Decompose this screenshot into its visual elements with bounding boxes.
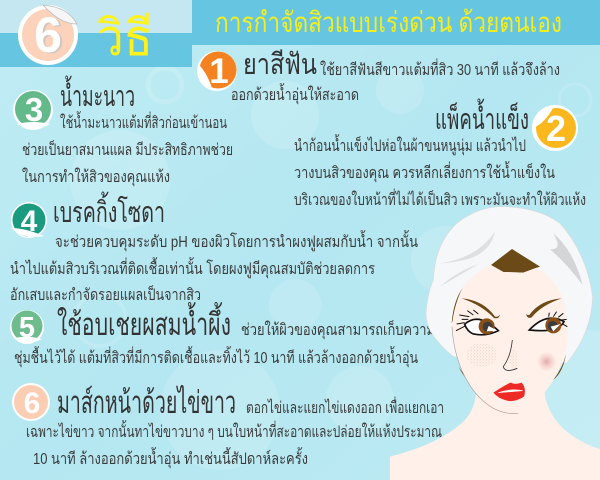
section 2: ice pack (294, 98, 586, 209)
eyebrows (462, 298, 562, 318)
heading 3: น้ำมะนาว (60, 75, 135, 113)
badge 3 (13, 90, 53, 130)
heading 2: แพ็คน้ำแข็ง (435, 98, 529, 136)
badge 1 (197, 51, 237, 91)
body 1 (231, 58, 560, 105)
header band: left (0, 0, 192, 67)
section 1: toothpaste (197, 49, 560, 105)
badge 4: 4 (21, 205, 38, 238)
heading 1: ยาสีฟัน (243, 49, 317, 81)
face (452, 265, 568, 414)
body 2 (294, 134, 586, 209)
nose (503, 340, 517, 370)
shoulders and neck (390, 387, 600, 480)
body 3: ช่วยเป็นยาสมานแผล มีประสิทธิภาพช่วย (22, 139, 233, 159)
body 1: ออกด้วยน้ำอุ่นให้สะอาด (231, 83, 359, 105)
body 3: ใช้น้ำมะนาวแต้มที่สิวก่อนเข้านอน (60, 111, 227, 132)
section 3: lemon (13, 75, 233, 187)
heading 4: เบรคกิ้งโซดา (53, 191, 165, 229)
badge 5 (10, 310, 44, 344)
towel (426, 207, 593, 363)
body 2: นำก้อนน้ำแข็งไปห่อในผ้าขนหนูนุ่ม แล้วนำไป (294, 134, 526, 156)
badge: large 6: 6 (36, 8, 64, 64)
body 6 (26, 396, 444, 469)
illustration: woman with towel (390, 207, 600, 480)
badge 6 (12, 383, 50, 421)
right eye (529, 312, 567, 333)
acne spots (466, 343, 518, 369)
body 6: ตอกไข่และแยกไข่แดงออก เพื่อแยกเอา (246, 396, 444, 417)
header band: right (192, 0, 600, 45)
pimple (537, 352, 557, 372)
badge 2 (532, 105, 578, 151)
body 5 (14, 319, 435, 368)
body 3 (22, 111, 233, 187)
badge: large 6: 6 (34, 7, 62, 63)
body 6: เฉพาะไข่ขาว จากนั้นทาไข่ขาวบาง ๆ บนใบหน้าที่สะอาดและปล่อยให้แห้งประมาณ (26, 420, 442, 441)
towel folds (440, 232, 583, 287)
badge: large 6 (18, 5, 78, 65)
left eye (456, 310, 498, 335)
body 3: ในการทำให้สิวของคุณแห้ง (22, 167, 170, 187)
body 4: อักเสบและกำจัดรอยแผลเป็นจากสิว (10, 284, 201, 304)
body 4: จะช่วยควบคุมระดับ pH ของผิวโดยการนำผงฟูผสมกับน้ำ จากนั้น (55, 230, 418, 252)
badge 6: 6 (24, 387, 40, 420)
lips (493, 383, 525, 401)
badge 4 (11, 202, 47, 238)
heading: 6 ways: วิธี (97, 10, 153, 66)
body 5: ช่วยให้ผิวของคุณสามารถเก็บความ (241, 319, 435, 340)
badge 1: 1 (209, 52, 229, 91)
badge 2: 2 (546, 108, 566, 149)
hair (491, 249, 540, 273)
body 4 (10, 230, 418, 304)
heading 6: มาส์กหน้าด้วยไข่ขาว (57, 385, 236, 420)
section 5: cinnamon honey (10, 302, 435, 368)
body 6: 10 นาที ล้างออกด้วยน้ำอุ่น ทำเช่นนี้สัปดาห์ละครั้ง (33, 447, 308, 469)
body 5: ชุ่มชื้นไว้ได้ แต้มที่สิวที่มีการติดเชื้อและทิ้งไว้ 10 นาที แล้วล้างออกด้วยน้ำอุ่น (14, 346, 418, 368)
body 4: นำไปแต้มสิวบริเวณที่ติดเชื้อเท่านั้น โดยผงฟูมีคุณสมบัติช่วยลดการ (10, 257, 375, 279)
badge 5: 5 (19, 312, 35, 344)
section 6: egg white mask (12, 383, 444, 469)
heading 5: ใช้อบเชยผสมน้ำผึ้ง (57, 302, 231, 342)
badge 3: 3 (25, 91, 43, 128)
section 4: baking soda (10, 191, 418, 304)
